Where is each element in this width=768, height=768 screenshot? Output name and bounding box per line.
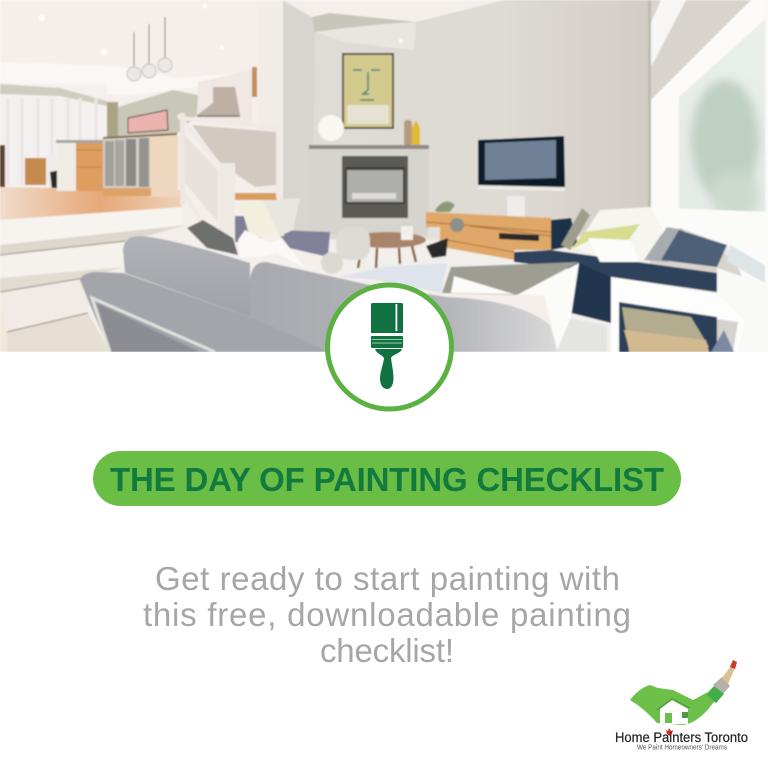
glass cabinet block	[103, 133, 178, 197]
table lamp and vases	[318, 115, 420, 146]
round coffee table	[350, 226, 448, 268]
upper bulkhead	[312, 13, 416, 32]
photo: living room interior	[0, 0, 768, 352]
kitchen island	[56, 140, 103, 191]
cushions on sofa	[187, 220, 447, 293]
dark blue leather sofa	[514, 207, 727, 323]
fireplace	[309, 145, 429, 235]
body text	[143, 560, 631, 669]
body text: checklist!	[320, 632, 454, 669]
white side table with magazines	[611, 268, 768, 352]
far room back wall	[118, 90, 198, 137]
title text: THE DAY OF PAINTING CHECKLIST	[110, 461, 664, 498]
logo wordmark: Home Painters Toronto	[615, 730, 748, 745]
glass stair railing	[178, 113, 278, 235]
logo swoosh	[630, 660, 737, 725]
icon: paintbrush	[371, 303, 403, 389]
icon: paintbrush badge	[328, 285, 452, 409]
logo house	[657, 699, 690, 724]
ceiling	[0, 0, 283, 130]
logo tagline: We Paint Homeowners' Dreams	[637, 744, 727, 752]
far dining table and chairs	[0, 145, 60, 191]
right window	[648, 0, 768, 293]
wood floor upper level	[0, 187, 182, 220]
pendant lamps	[127, 17, 172, 81]
curtained windows	[0, 84, 118, 187]
body text: Get ready to start painting with	[155, 560, 620, 597]
ceiling spot lights	[39, 4, 224, 55]
logo maple leaf	[666, 728, 673, 736]
logo: Home Painters Toronto	[615, 660, 748, 752]
grey ottoman and cushions behind sofa	[235, 198, 370, 274]
floor rug	[335, 248, 514, 280]
grey sofa	[80, 236, 607, 352]
stair steps	[0, 207, 187, 352]
main wall	[283, 0, 650, 240]
body text: this free, downloadable painting	[143, 596, 631, 633]
wall art	[342, 53, 394, 129]
title pill	[93, 451, 681, 506]
range hood	[197, 67, 257, 117]
television	[478, 136, 565, 191]
artwork on far wall	[128, 110, 168, 133]
central column	[258, 8, 283, 204]
logo brush	[707, 660, 737, 703]
white patterned pillow	[442, 262, 579, 350]
media console	[426, 196, 551, 260]
